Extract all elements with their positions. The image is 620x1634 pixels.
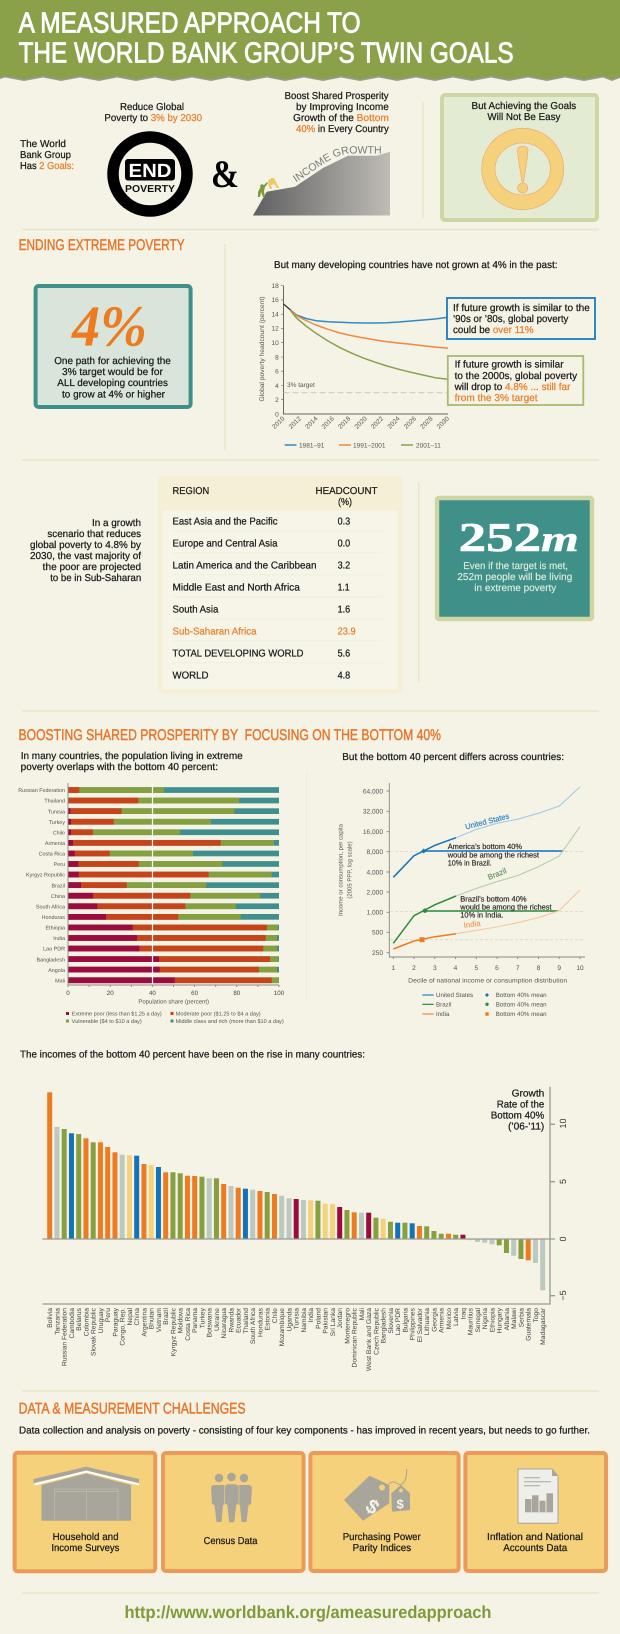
country labels: Colombia — [83, 1308, 90, 1336]
table: headcount by region — [158, 476, 402, 693]
x axis labels: 7 — [516, 965, 520, 972]
header banner — [0, 0, 620, 81]
stacked bar chart: population share: Armenia — [45, 841, 65, 847]
x axis: 2030 — [436, 415, 451, 431]
country labels: Lao PDR — [395, 1308, 402, 1335]
y axis — [259, 283, 448, 418]
icon: document with bar chart — [518, 1469, 558, 1523]
x axis labels: 3 — [433, 965, 437, 972]
intro: the World Bank Group has 2 goals — [20, 139, 74, 172]
x axis: 2018 — [337, 415, 352, 431]
table: headcount by region: 4.8 — [338, 671, 351, 682]
panel: 252m: in extreme poverty — [474, 583, 556, 594]
country labels: Rwanda — [228, 1308, 235, 1333]
x axis: 2016 — [321, 415, 336, 431]
x axis labels: 2 — [412, 965, 416, 972]
country labels: Nicaragua — [221, 1308, 228, 1338]
country labels: Iraq — [460, 1308, 467, 1320]
heading: bottom 40 percent differs: But the bottom 40 percent differs across countries: — [342, 752, 564, 763]
x axis labels: 5 — [474, 965, 478, 972]
icon: price tags: $ — [361, 1495, 383, 1519]
icon: house — [34, 1467, 139, 1521]
table: headcount by region: HEADCOUNT — [316, 486, 378, 497]
y axis: Global poverty headcount (percent) — [259, 297, 266, 401]
annotations: America’s bottom 40% — [448, 842, 522, 851]
legend: Vulnerable ($4 to $10 a day) — [72, 1018, 142, 1025]
series labels — [463, 812, 510, 930]
panel: 252m — [437, 498, 592, 619]
intro: the World Bank Group has 2 goals: The World — [20, 139, 66, 150]
stacked bar chart: population share: Costa Rica — [39, 852, 65, 858]
panel: 4 percent: ALL developing countries — [57, 378, 168, 389]
country labels: Paraguay — [112, 1307, 119, 1337]
stacked bar chart: population share: Kyrgyz Republic — [26, 873, 65, 879]
country labels: Czech Republic — [373, 1307, 380, 1355]
legend: Extreme poor (less than $1.25 a day) — [72, 1010, 162, 1018]
panel: but achieving the goals will not be easy — [442, 95, 597, 220]
y axis: 8 — [275, 354, 279, 361]
x axis labels: 0 — [66, 990, 70, 997]
x axis labels — [66, 990, 285, 1006]
country labels: Serbia — [518, 1308, 525, 1327]
panel: 252m: Even if the target is met, — [463, 561, 568, 572]
x axis labels: 40 — [149, 990, 156, 997]
axis numbers — [558, 1118, 568, 1301]
x axis: 2024 — [386, 415, 402, 431]
country labels: Poland — [315, 1308, 322, 1329]
legend: Bottom 40% mean — [496, 992, 547, 999]
intro: the World Bank Group has 2 goals: Has 2 Goals: — [20, 161, 74, 172]
y axis title: Income or consumption, per capita — [338, 823, 344, 916]
heading: data and measurement challenges: DATA & MEASUREMENT CHALLENGES — [19, 1400, 246, 1417]
y axis: 6 — [275, 368, 279, 376]
x axis labels: 8 — [537, 965, 541, 972]
goal 1 text: Reduce Global — [120, 102, 184, 113]
country labels: Slovenia — [388, 1308, 395, 1334]
country labels: Senegal — [475, 1307, 482, 1333]
footer url: http://www.worldbank.org/ameasuredapproach — [124, 1602, 492, 1622]
x axis labels: 4 — [454, 965, 458, 972]
country labels: Mozambique — [279, 1308, 286, 1346]
table: headcount by region: Middle East and North Africa — [172, 583, 300, 594]
x axis labels: 9 — [557, 965, 561, 972]
x axis labels: 100 — [274, 990, 285, 997]
text: data collection intro: Data collection and analysis on poverty - consisting of four key components - has improved in recent years, but needs to go further. — [19, 1426, 590, 1437]
legend — [66, 1010, 284, 1025]
legend: 1981–91 — [299, 442, 325, 449]
country labels: Bangladesh — [380, 1308, 388, 1343]
text: growth scenario: In a growth — [92, 518, 141, 529]
annotations: would be among the richest — [447, 850, 540, 859]
stacked bar chart: population share: Thailand — [44, 799, 65, 805]
stacked bar chart: population share: Russian Federation — [18, 788, 65, 794]
stacked bar chart: population share: Mali — [55, 978, 65, 984]
country labels: India — [308, 1308, 315, 1323]
x axis: 2020 — [354, 415, 369, 431]
stacked bar chart: population share: India — [53, 936, 65, 942]
callout: 2000s growth: If future growth is similar — [455, 360, 564, 371]
country labels: Cambodia — [69, 1308, 76, 1338]
table: headcount by region: 23.9 — [338, 627, 356, 638]
card: inflation and national accounts data — [465, 1453, 606, 1571]
axis numbers: 0 — [558, 1236, 568, 1242]
panel: 4 percent: to grow at 4% or higher — [62, 390, 166, 400]
icon: income growth mountain: INCOME GROWTH — [292, 146, 381, 182]
callout: 2000s growth — [448, 356, 583, 405]
text: growth scenario — [30, 518, 141, 584]
table: headcount by region: WORLD — [172, 671, 208, 682]
icon: income growth mountain — [253, 146, 390, 216]
table: headcount by region: 0.3 — [338, 517, 351, 528]
table: headcount by region: REGION — [172, 486, 209, 497]
card: census data — [163, 1453, 304, 1571]
stacked bar chart: population share: Bangladesh — [37, 957, 65, 963]
country labels: Uganda — [286, 1308, 293, 1331]
x axis labels: 10 — [576, 965, 584, 972]
card: census data: Census Data — [204, 1536, 258, 1547]
country labels: Armenia — [438, 1308, 446, 1333]
callout: 90s or 80s growth — [447, 298, 595, 339]
card: purchasing power parity indices — [310, 1453, 459, 1571]
bars — [47, 1092, 545, 1290]
stacked bar chart: population share: Chile — [53, 830, 65, 836]
table: headcount by region: (%) — [338, 497, 352, 508]
x axis labels: 80 — [233, 990, 241, 997]
goal 2 text: Boost Shared Prosperity — [285, 91, 389, 102]
panel: 252m: 252 m — [459, 514, 579, 560]
table: headcount by region: TOTAL DEVELOPING WORLD — [172, 649, 304, 660]
y axis labels: 500 — [372, 930, 383, 937]
country labels: Malawi — [511, 1307, 518, 1329]
icon: end poverty logo — [113, 137, 187, 211]
goal 2 text: 40% in Every Country — [296, 124, 389, 135]
line chart: decile incomes — [338, 783, 585, 1018]
series labels: India — [463, 919, 482, 930]
stacked bar chart: population share: Brazil — [52, 883, 65, 889]
country labels: Moldova — [178, 1308, 184, 1333]
text: overlap intro: poverty overlaps with the bottom 40 percent: — [21, 762, 218, 773]
icon: climbers — [258, 178, 279, 197]
country labels: Bolivia — [47, 1308, 54, 1328]
x axis labels: Population share (percent) — [138, 999, 209, 1006]
country labels: Ukraine — [214, 1308, 221, 1331]
icon: people — [211, 1473, 252, 1522]
y axis labels: 16,000 — [363, 829, 383, 836]
card: household and income surveys: Household and — [53, 1532, 119, 1543]
y axis labels: 250 — [372, 950, 383, 957]
goal 2 text: by Improving Income — [296, 102, 389, 113]
callout: 90s or 80s growth: If future growth is similar to the — [453, 303, 590, 314]
country labels: Peru — [105, 1308, 112, 1322]
y axis labels — [363, 788, 383, 957]
goal 1 text: Poverty to 3% by 2030 — [104, 113, 202, 124]
y axis: 2 — [275, 397, 279, 404]
text: growth scenario: global poverty to 4.8% by — [30, 540, 141, 551]
stacked bar chart: population share: Lao PDR — [43, 947, 65, 953]
card: inflation and national accounts data: Inflation and National — [487, 1532, 583, 1543]
axis title: Bottom 40% — [491, 1111, 544, 1122]
ampersand: & — [211, 153, 239, 196]
legend: Bottom 40% mean — [496, 1002, 547, 1008]
country labels: Estonia — [264, 1308, 272, 1330]
country labels: Nigeria — [482, 1308, 489, 1329]
table: headcount by region: Latin America and the Caribbean — [172, 561, 316, 572]
icon: exclamation ring — [482, 128, 564, 210]
country labels: Lithuania — [424, 1308, 431, 1335]
country labels — [47, 1307, 547, 1371]
axis numbers: 5 — [558, 1179, 568, 1184]
axis title: Growth — [512, 1089, 544, 1100]
country labels: Ethiopia — [489, 1308, 496, 1332]
table: headcount by region: 1.1 — [338, 583, 350, 594]
legend — [285, 442, 441, 449]
text: growth scenario: 2030, the vast majority of — [30, 551, 141, 562]
series lines — [284, 304, 448, 379]
icon: end poverty logo: POVERTY — [125, 184, 175, 195]
title — [19, 7, 514, 69]
axis numbers: 10 — [558, 1118, 568, 1129]
x axis: 2028 — [419, 415, 435, 431]
text: growth scenario: scenario that reduces — [47, 529, 141, 540]
country labels: Bulgaria — [402, 1308, 409, 1333]
card: household and income surveys — [15, 1453, 155, 1571]
country labels: Dominican Republic — [352, 1307, 358, 1367]
country labels: Togo — [533, 1308, 540, 1323]
country labels: Brazil — [163, 1307, 170, 1325]
panel: 4 percent — [36, 286, 191, 407]
country labels: Botswana — [206, 1308, 214, 1337]
stacked bar chart: population share: Turkey — [49, 820, 65, 826]
callout: 2000s growth: will drop to 4.8% ... still far — [454, 382, 571, 393]
legend: Brazil — [436, 1002, 451, 1008]
country labels: Pakistan — [322, 1308, 330, 1334]
series: Brazil — [393, 827, 580, 943]
heading: boosting shared prosperity: BOOSTING SHARED PROSPERITY BY FOCUSING ON THE BOTTOM 40% — [18, 727, 441, 744]
country labels: South Africa — [250, 1308, 257, 1344]
country labels: Russian Federation — [62, 1308, 68, 1366]
stacked bar chart: population share: Peru — [54, 862, 65, 868]
annotations: 10% in Brazil. — [448, 858, 492, 868]
panel: but achieving the goals will not be easy: But Achieving the Goals — [472, 101, 576, 112]
table: headcount by region: 5.6 — [338, 649, 351, 660]
country labels: Guatemala — [526, 1308, 532, 1341]
country labels: El Salvador — [417, 1307, 424, 1342]
series: India — [393, 890, 580, 949]
stacked bar chart: population share: South Africa — [36, 904, 65, 910]
x axis labels: 6 — [495, 965, 499, 972]
stacked bar chart: population share: China — [51, 894, 65, 900]
country labels: Mauritius — [468, 1307, 474, 1335]
series labels: Brazil — [486, 866, 508, 882]
country labels: West Bank and Gaza — [366, 1308, 373, 1371]
stacked bar chart: population share: Ethiopia — [46, 926, 65, 932]
country labels: Vietnam — [156, 1308, 163, 1332]
x axis: 2022 — [370, 415, 385, 431]
y axis labels: 2,000 — [366, 889, 383, 896]
stacked bar chart: population share: Angola — [48, 968, 65, 974]
table: headcount by region: South Asia — [172, 605, 219, 616]
panel: 4 percent: One path for achieving the — [54, 356, 171, 367]
goal 1 text — [104, 102, 202, 124]
country labels: Tanzania — [54, 1308, 61, 1335]
x axis labels: 20 — [107, 990, 114, 997]
goal 2 text — [285, 91, 389, 135]
country labels: Slovak Republic — [90, 1307, 98, 1356]
title: THE WORLD BANK GROUP’S TWIN GOALS — [19, 37, 514, 69]
x axis labels: 1 — [391, 965, 395, 972]
country labels: Ecuador — [236, 1307, 242, 1333]
country labels: Belarus — [76, 1307, 83, 1331]
country labels: Thailand — [243, 1308, 250, 1334]
country labels: Mexico — [446, 1308, 453, 1329]
y axis labels: 8,000 — [366, 849, 383, 856]
x axis labels: 60 — [191, 990, 199, 997]
callout: 90s or 80s growth: could be over 11% — [453, 325, 534, 336]
x axis: 2012 — [288, 415, 303, 431]
country labels: Bhutan — [148, 1308, 156, 1329]
y axis labels: 32,000 — [363, 809, 383, 816]
y axis labels: 64,000 — [363, 788, 383, 795]
country labels: Honduras — [257, 1307, 264, 1337]
country labels: Turkey — [199, 1307, 206, 1328]
card: purchasing power parity indices: Parity Indices — [353, 1543, 411, 1554]
intro: the World Bank Group has 2 goals: Bank Group — [20, 150, 71, 161]
country labels: Sri Lanka — [330, 1308, 337, 1336]
legend: Moderate poor ($1.25 to $4 a day) — [176, 1010, 261, 1018]
goal 2 text: Growth of the Bottom — [293, 113, 389, 124]
line chart: poverty projections — [259, 283, 451, 449]
country labels: Mali — [359, 1307, 366, 1320]
y axis: 16 — [271, 297, 279, 304]
country labels: Uruguay — [98, 1307, 105, 1333]
stacked bar chart: population share: Tunisia — [48, 809, 65, 815]
text: growth scenario: to be in Sub-Saharan — [50, 573, 141, 584]
y axis: 14 — [271, 312, 279, 318]
x axis: 2010 — [271, 415, 287, 431]
legend: 1991–2001 — [353, 442, 386, 449]
y axis labels: 1,000 — [366, 910, 383, 917]
country labels: Panama — [192, 1308, 199, 1333]
country labels: Georgia — [431, 1308, 438, 1332]
country labels: Namibia — [301, 1308, 308, 1333]
heading: ending extreme poverty: ENDING EXTREME POVERTY — [19, 237, 185, 254]
title: A MEASURED APPROACH TO — [19, 7, 361, 39]
axis numbers: −5 — [558, 1290, 568, 1301]
table: headcount by region: Europe and Central Asia — [172, 539, 278, 550]
x axis labels — [391, 965, 584, 985]
icon: end poverty logo: END — [128, 161, 172, 182]
y axis title: (2005 PPP, log scale) — [346, 841, 354, 899]
country labels: Tunisia — [294, 1308, 300, 1329]
x axis — [271, 415, 451, 431]
x axis: 2014 — [304, 415, 320, 431]
series: United States — [393, 787, 580, 877]
country labels: Congo, Rep. — [120, 1308, 126, 1346]
country labels: Madagascar — [540, 1307, 547, 1345]
card: purchasing power parity indices: Purchasing Power — [343, 1532, 421, 1543]
country labels: Jordan — [337, 1308, 344, 1328]
legend: India — [436, 1011, 450, 1018]
country labels: China — [134, 1308, 141, 1325]
y axis: 0 — [275, 411, 279, 418]
axis title — [491, 1089, 545, 1133]
legend: Bottom 40% mean — [496, 1011, 547, 1018]
country labels: Chile — [272, 1308, 279, 1323]
axis title: Rate of the — [497, 1100, 545, 1111]
y axis: 4 — [275, 383, 279, 390]
text: incomes on the rise: The incomes of the bottom 40 percent have been on the rise in many countries: — [20, 1049, 365, 1060]
callout: 2000s growth: from the 3% target — [455, 393, 538, 404]
text: growth scenario: the poor are projected — [43, 562, 141, 573]
axis title: (’06-’11) — [508, 1122, 544, 1133]
country labels: Latvia — [453, 1308, 460, 1326]
stacked bar chart: population share: Honduras — [42, 915, 65, 921]
legend: Middle class and rich (more than $10 a day) — [176, 1018, 284, 1025]
country labels: Nepal — [127, 1307, 134, 1325]
country labels: Kyrgyz Republic — [170, 1307, 177, 1356]
table: headcount by region: East Asia and the Pacific — [172, 517, 278, 528]
icon: price tags: $ — [396, 1496, 404, 1512]
text: overlap intro — [21, 751, 243, 773]
y axis title — [338, 823, 354, 916]
card: household and income surveys: Income Surveys — [51, 1543, 119, 1554]
y axis labels: 4,000 — [366, 869, 383, 876]
callout: 90s or 80s growth: ’90s or ’80s, global poverty — [453, 314, 568, 325]
table: headcount by region: Sub-Saharan Africa — [172, 627, 257, 638]
callout: 2000s growth: to the 2000s, global poverty — [455, 371, 577, 382]
card: inflation and national accounts data: Accounts Data — [503, 1543, 568, 1554]
y axis: 12 — [271, 326, 279, 333]
annotations: would be among the richest — [459, 902, 552, 911]
country labels: Argentina — [141, 1308, 148, 1337]
axes — [42, 1087, 555, 1304]
legend — [422, 992, 547, 1018]
stacked bar chart: population share — [18, 783, 285, 1025]
annotations: 10% in India. — [460, 911, 503, 920]
country labels: Philippines — [410, 1307, 416, 1340]
legend: 2001–11 — [416, 442, 441, 449]
country labels: Albania — [504, 1308, 511, 1330]
3 percent target: 3% target — [287, 382, 315, 389]
panel: 4 percent: 3% target would be for — [62, 367, 163, 378]
x axis: 2026 — [403, 415, 418, 431]
series labels: United States — [464, 812, 510, 831]
annotations — [447, 842, 552, 920]
table: headcount by region: 0.0 — [338, 539, 351, 550]
country labels: Costa Rica — [185, 1308, 192, 1341]
table: headcount by region: 1.6 — [338, 605, 351, 616]
table: headcount by region: 3.2 — [338, 561, 351, 572]
legend: United States — [436, 992, 473, 999]
panel: 4 percent: 4% — [71, 294, 147, 358]
annotations: Brazil’s bottom 40% — [460, 894, 527, 903]
y axis: 18 — [271, 283, 279, 290]
country labels: Hungary — [496, 1307, 504, 1333]
icon: price tags — [344, 1469, 410, 1521]
chart heading: But many developing countries have not grown at 4% in the past: — [274, 260, 558, 271]
x axis labels: Decile of national income or consumption distribution — [408, 978, 568, 985]
text: overlap intro: In many countries, the population living in extreme — [21, 751, 243, 762]
column chart: growth rate of the bottom 40 percent — [42, 1087, 568, 1371]
country labels: Montenegro — [344, 1308, 351, 1344]
panel: 252m: 252m people will be living — [457, 572, 572, 583]
y axis: 10 — [271, 340, 279, 347]
panel: but achieving the goals will not be easy: Will Not Be Easy — [487, 112, 560, 123]
